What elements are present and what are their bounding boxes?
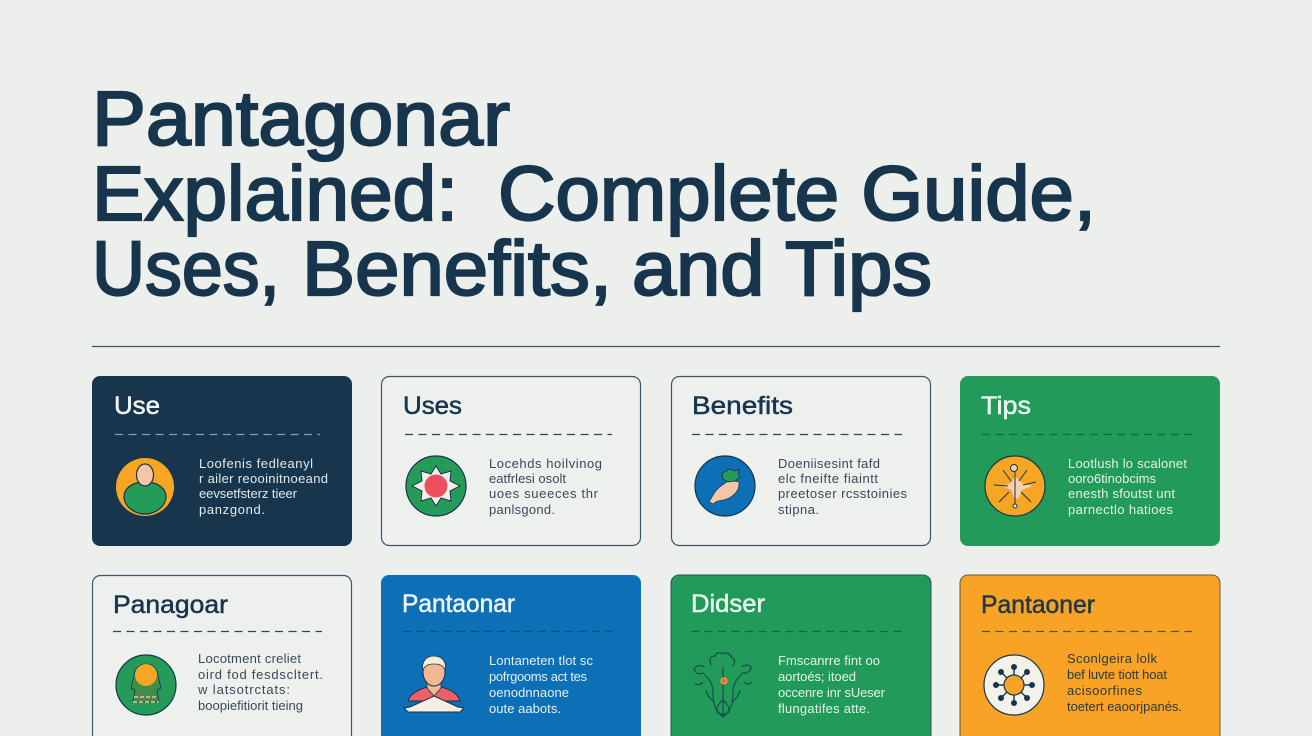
heading: Uses: Uses (403, 392, 462, 420)
body text: Use: panzgond. (199, 502, 265, 517)
body text: Pantaonar: pofrgooms act tes (489, 669, 588, 684)
body text: Pantaoner: bef luvte tiott hoat (1067, 667, 1167, 682)
title: and Tips (632, 226, 932, 312)
heading: Pantaonar: Pantaonar (402, 590, 515, 618)
body text: Use: eevsetfsterz tieer (199, 486, 298, 501)
body text: Use: r ailer reooinitnoeand (199, 471, 328, 486)
body text: Didser: occenre inr sUeser (778, 685, 886, 700)
body text: Uses: eatfrlesi osolt (489, 471, 566, 486)
heading: Didser: Didser (691, 590, 765, 618)
icon: figure on green circle (116, 655, 176, 715)
body text: Didser: aortoés; itoed (778, 669, 856, 684)
body text: Panagoar: w latsotrctats: (197, 682, 290, 697)
body text: Pantaoner: toetert eaoorjpanés. (1067, 699, 1182, 714)
icon: hand on blue circle (695, 456, 755, 516)
body text: Pantaonar: Lontaneten tlot sc (489, 653, 594, 668)
body text: Benefits: elc fneifte fiaintt (778, 471, 878, 486)
body text: Tips: enesth sfoutst unt (1068, 486, 1175, 501)
title: Uses, (92, 226, 280, 312)
body text: Pantaoner: acisoorfines (1067, 683, 1142, 698)
body text: Pantaoner: Sconlgeira lolk (1067, 651, 1158, 666)
icon: person portrait (404, 656, 464, 712)
icon: star on green circle (406, 456, 466, 516)
panel: Didser (671, 575, 931, 736)
body text: Uses: uoes sueeces thr (489, 486, 599, 501)
body text: Panagoar: boopiefitiorit tieing (198, 698, 303, 713)
body text: Uses: panlsgond. (489, 502, 555, 517)
body text: Benefits: stipna. (778, 502, 819, 517)
heading: Benefits: Benefits (692, 392, 793, 420)
body text: Panagoar: Locotment creliet (198, 651, 301, 666)
title: Pantagonar (92, 76, 510, 162)
heading: Pantaoner: Pantaoner (981, 591, 1095, 619)
body text: Didser: flungatifes atte. (778, 701, 870, 716)
panel: Pantaoner (960, 575, 1220, 736)
body text: Uses: Locehds hoilvinog (489, 456, 602, 471)
icon: burst on orange circle (985, 456, 1045, 516)
body text: Use: Loofenis fedleanyl (199, 456, 313, 471)
panel: Uses (382, 376, 640, 546)
title: Explained: (92, 151, 458, 237)
panel: Benefits (672, 376, 930, 546)
title: Complete Guide, (498, 151, 1096, 237)
icon: person on orange circle (116, 458, 174, 516)
icon: leafy plant (694, 653, 751, 717)
title: Benefits, (302, 226, 612, 312)
body text: Tips: ooro6tinobcims (1068, 471, 1156, 486)
panel: Pantaonar (381, 575, 641, 736)
body text: Didser: Fmscanrre fint oo (778, 653, 880, 668)
body text: Tips: Lootlush lo scalonet (1068, 456, 1187, 471)
body text: Pantaonar: oute aabots. (489, 701, 561, 716)
body text: Pantaonar: oenodnnaone (489, 685, 569, 700)
panel: Panagoar (92, 576, 352, 736)
heading: Panagoar: Panagoar (113, 591, 228, 619)
icon: hub and nodes (984, 655, 1044, 715)
body text: Panagoar: oird fod fesdscltert. (198, 667, 323, 682)
title (92, 76, 1096, 312)
panel: Tips (960, 376, 1220, 546)
body text: Benefits: preetoser rcsstoinies (778, 486, 908, 501)
panel: Use (92, 376, 352, 546)
body text: Benefits: Doeniisesint fafd (778, 456, 880, 471)
body text: Tips: parnectlo hatioes (1068, 502, 1174, 517)
heading: Use: Use (114, 392, 160, 420)
heading: Tips: Tips (981, 392, 1031, 420)
